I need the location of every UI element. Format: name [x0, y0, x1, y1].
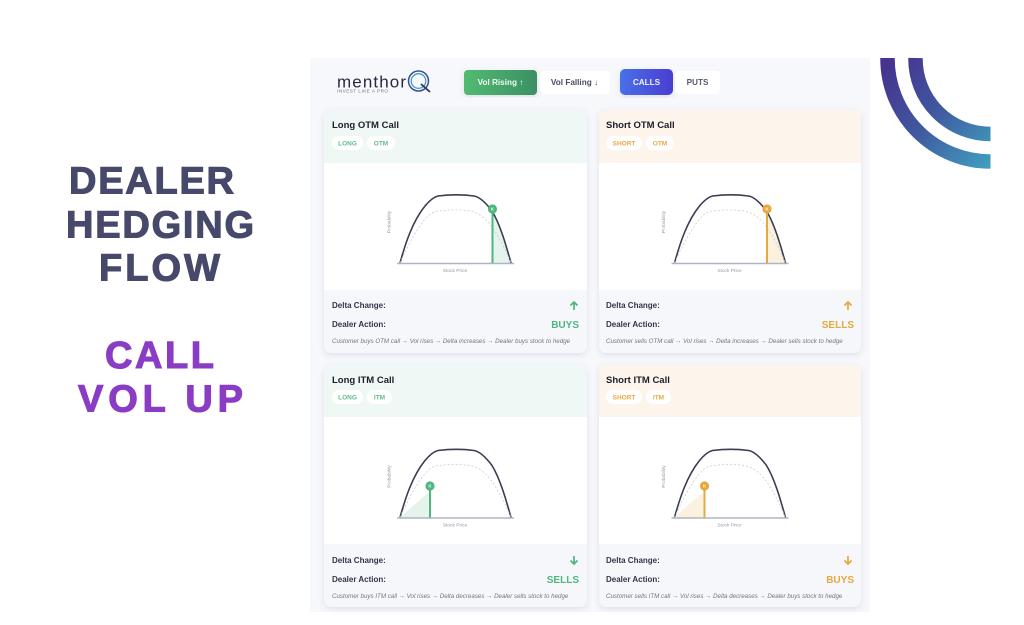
toggle: puts: [675, 71, 720, 94]
card: long ITM call: LONG: [338, 394, 357, 401]
toggle: vol rising: [464, 70, 537, 95]
icon: delta up arrow: [570, 302, 578, 310]
card header: [324, 110, 587, 163]
card: short OTM call: SHORT: [613, 140, 635, 147]
card: short ITM call: [599, 365, 861, 607]
delta and dealer action: Delta Change:: [606, 301, 660, 310]
payoff chart: Stock Price: [717, 268, 742, 274]
delta and dealer action: [606, 301, 854, 345]
subtitle: call vol up: CALL: [105, 335, 214, 377]
delta and dealer action: Delta Change:: [332, 556, 386, 565]
delta and dealer action: [332, 301, 579, 345]
toggle: puts: PUTS: [687, 78, 709, 87]
card: short OTM call: [599, 110, 861, 353]
toggle: vol falling: [540, 71, 610, 94]
card header: [599, 365, 861, 417]
card: short ITM call: Short ITM Call: [606, 375, 670, 386]
payoff chart: Probability: [386, 210, 392, 233]
card: long OTM call: Long OTM Call: [332, 120, 399, 131]
card: short OTM call: Short OTM Call: [606, 120, 675, 131]
payoff chart: K: [703, 484, 707, 489]
subtitle: call vol up: [78, 335, 243, 420]
card: long OTM call: OTM: [374, 140, 388, 147]
card: long OTM call: LONG: [338, 140, 357, 147]
delta and dealer action: Dealer Action:: [606, 575, 660, 584]
payoff chart: Probability: [386, 465, 392, 488]
delta and dealer action: Dealer Action:: [606, 320, 660, 329]
payoff chart: [386, 449, 514, 528]
icon: delta down arrow: [844, 556, 852, 564]
logo: menthor Q: INVEST LIKE A PRO: [337, 88, 388, 94]
delta and dealer action: [606, 556, 854, 600]
payoff chart: K: [428, 484, 432, 489]
panel: dashboard: [310, 58, 870, 612]
card: long ITM call: Long ITM Call: [332, 375, 394, 386]
payoff chart: [661, 449, 788, 528]
card: short ITM call: SHORT: [613, 394, 635, 401]
delta and dealer action: Dealer Action:: [332, 320, 386, 329]
toggle: calls: CALLS: [633, 78, 661, 87]
delta and dealer action: [332, 556, 579, 600]
delta and dealer action: SELLS: [822, 320, 854, 331]
payoff chart: Stock Price: [443, 268, 467, 274]
delta and dealer action: BUYS: [826, 575, 854, 586]
title: dealer hedging flow: [66, 160, 254, 290]
delta and dealer action: Delta Change:: [606, 556, 660, 565]
card: short ITM call: ITM: [653, 394, 664, 401]
payoff chart: K: [491, 207, 495, 212]
card: long OTM call: [324, 110, 587, 353]
toggle: vol falling: Vol Falling ↓: [551, 78, 598, 87]
delta and dealer action: Dealer Action:: [332, 575, 386, 584]
title: dealer hedging flow: FLOW: [99, 248, 220, 290]
logo: menthor Q: menthor: [337, 72, 406, 92]
icon: delta up arrow: [844, 302, 852, 310]
icon: delta down arrow: [570, 556, 578, 564]
payoff chart: [661, 195, 788, 274]
delta and dealer action: Customer buys ITM call → Vol rises → Delta decreases → Dealer sells stock to hedge: [332, 593, 569, 600]
payoff chart: K: [765, 207, 769, 212]
decorative brand arcs: [887, 58, 990, 162]
card header: [599, 110, 861, 163]
toggle: vol rising: Vol Rising ↑: [478, 78, 523, 87]
delta and dealer action: SELLS: [547, 575, 579, 586]
card: short OTM call: OTM: [653, 140, 667, 147]
title: dealer hedging flow: DEALER: [69, 160, 234, 202]
delta and dealer action: Customer buys OTM call → Vol rises → Delta increases → Dealer buys stock to hedge: [332, 338, 571, 345]
payoff chart: Probability: [661, 210, 667, 233]
card: long ITM call: [324, 365, 587, 607]
payoff chart: Stock Price: [717, 522, 742, 528]
delta and dealer action: Delta Change:: [332, 301, 386, 310]
title: dealer hedging flow: HEDGING: [66, 204, 254, 246]
card: long ITM call: ITM: [374, 394, 385, 401]
payoff chart: Stock Price: [443, 522, 467, 528]
delta and dealer action: Customer sells OTM call → Vol rises → Delta increases → Dealer sells stock to hedge: [606, 338, 843, 345]
delta and dealer action: Customer sells ITM call → Vol rises → Delta decreases → Dealer buys stock to hedge: [606, 593, 843, 600]
logo: menthor Q: [337, 71, 430, 94]
toggle: calls: [620, 69, 673, 95]
payoff chart: [386, 195, 514, 274]
delta and dealer action: BUYS: [551, 320, 579, 331]
payoff chart: Probability: [661, 465, 667, 488]
card header: [324, 365, 587, 417]
subtitle: call vol up: VOL UP: [78, 378, 243, 420]
